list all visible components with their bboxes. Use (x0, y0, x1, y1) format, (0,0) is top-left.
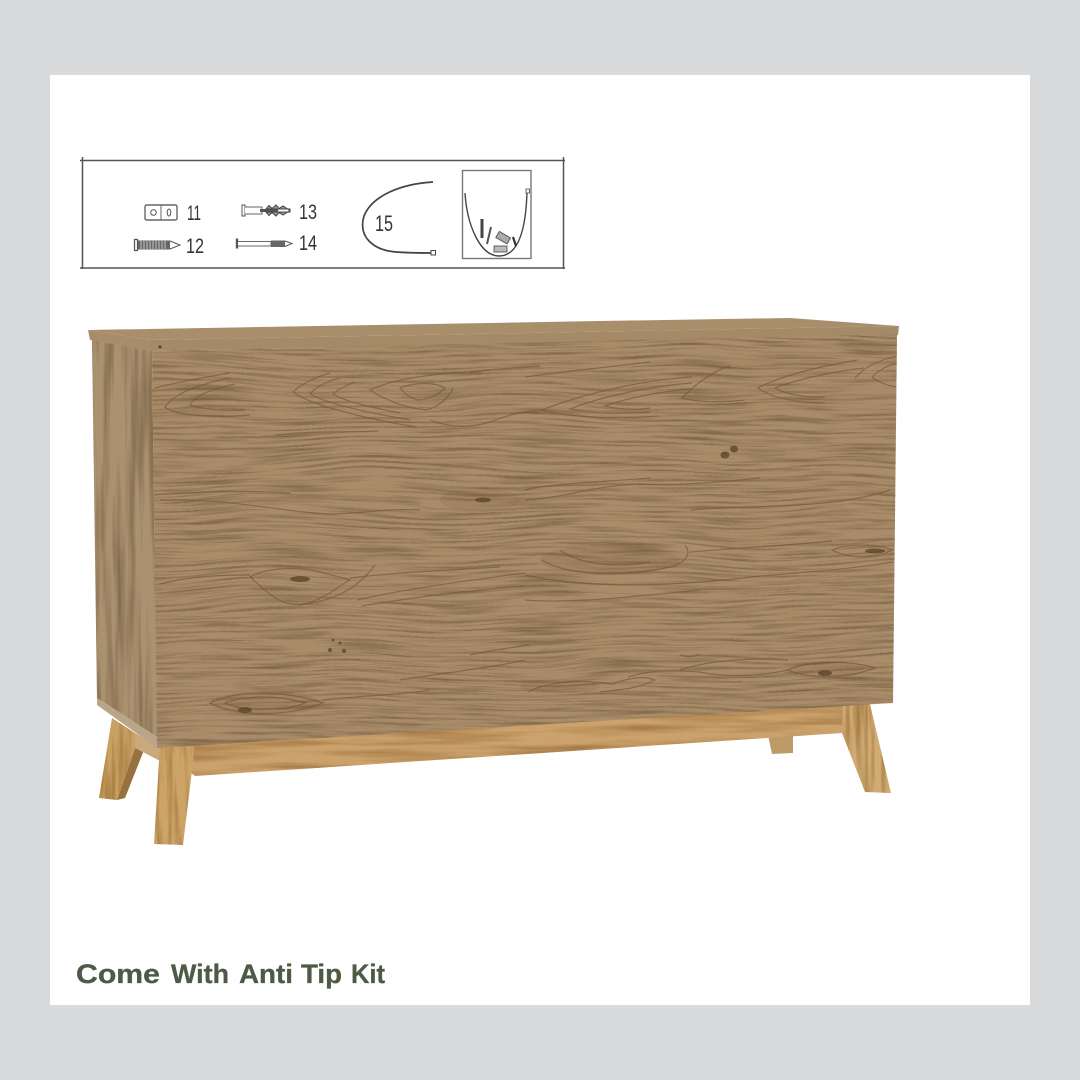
side panel (92, 340, 157, 737)
back panel with wood grain (152, 334, 897, 748)
caption: Anti (239, 959, 293, 989)
tonal shading (210, 488, 865, 715)
caption: Kit (351, 959, 385, 989)
top rear edge (151, 326, 899, 351)
part 12: tapping screw: 12 (186, 235, 204, 258)
side bottom edge (97, 698, 157, 748)
kit packaging bag (462, 170, 531, 258)
part 14: long screw (237, 232, 317, 255)
part 14: long screw: 14 (299, 232, 317, 255)
back-left leg (99, 718, 144, 800)
part 11: bracket plate (145, 202, 201, 225)
part 12: tapping screw (134, 235, 204, 258)
rail side return (135, 733, 160, 761)
small far rear leg (768, 733, 793, 754)
panel: anti tip kit parts diagram (80, 157, 565, 269)
part 15: safety strap: 15 (375, 211, 393, 236)
cathedral grain lines (150, 356, 897, 714)
wooden base rail (192, 706, 843, 776)
caption: With (171, 959, 229, 989)
part 13: wall anchor with screw (242, 201, 317, 224)
cabinet top surface (88, 318, 899, 340)
knots (238, 446, 885, 713)
caption: Come (76, 959, 160, 989)
diagram frame (80, 157, 565, 269)
dresser: rear view (88, 318, 899, 845)
mounting screw hole (158, 346, 162, 348)
front-right leg (842, 704, 891, 793)
infographic canvas (50, 75, 1030, 1005)
top front edge, side (88, 330, 151, 351)
part 11: bracket plate: 11 (187, 202, 201, 225)
white card (50, 75, 1030, 1005)
front-left leg (154, 746, 195, 845)
part 13: wall anchor with screw: 13 (299, 201, 317, 224)
part 15: safety strap (363, 182, 436, 255)
caption: Tip (301, 959, 342, 989)
